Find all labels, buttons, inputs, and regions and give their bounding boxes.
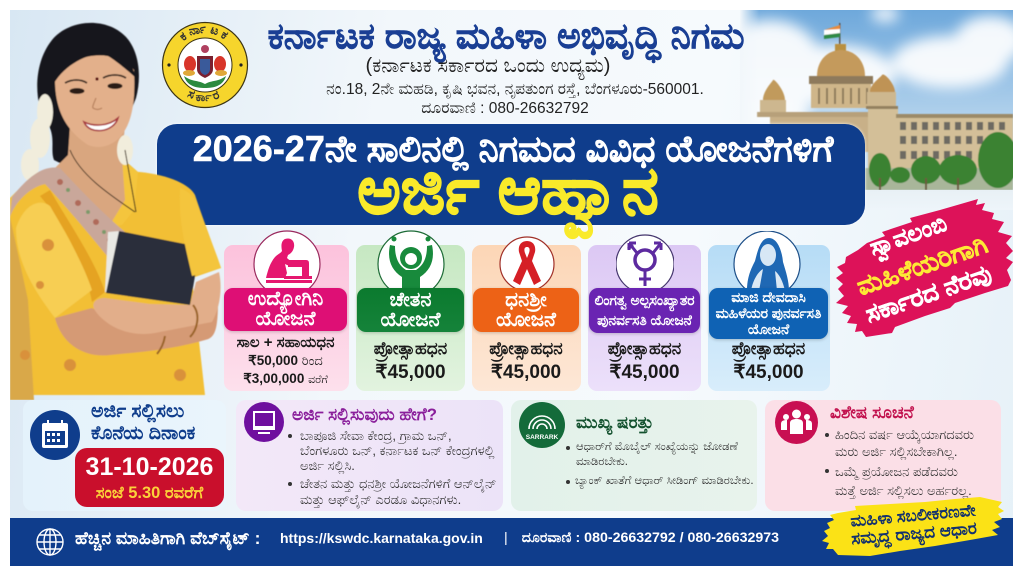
scheme label: Ex-Devadasi (709, 288, 828, 339)
notice bullets: ಹಿಂದಿನ ವರ್ಷ ಆಯ್ಕೆಯಾಗದವರು (835, 427, 974, 442)
Transgender benefit: ಪ್ರೋತ್ಸಾಹಧನ (608, 339, 681, 358)
conditions bullets: ಮಾಡಿರಬೇಕು. (576, 456, 628, 468)
how to apply bullets: ಚೇತನ ಮತ್ತು ಧನಶ್ರೀ ಯೋಜನೆಗಳಿಗೆ ಆನ್‌ಲೈನ್ (300, 476, 496, 491)
panel: main conditions (511, 400, 757, 511)
Udyogini benefit: ₹3,00,000 ವರೆಗೆ (243, 371, 328, 386)
banner call to apply: ಅರ್ಜಿ ಆಹ್ವಾನ (357, 153, 659, 227)
icon: red ribbon (499, 236, 555, 288)
card: Transgender rehabilitation (588, 245, 701, 391)
scheme label: Udyogini (224, 288, 347, 331)
conditions heading: ಮುಖ್ಯ ಷರತ್ತು (576, 413, 653, 432)
scheme label: Ex-Devadasi: ಮಾಜಿ ದೇವದಾಸಿ (731, 290, 806, 305)
Transgender benefit (608, 339, 681, 383)
woman with book (10, 22, 222, 400)
scheme label: Ex-Devadasi: ಯೋಜನೆ (748, 322, 789, 337)
notice bullets (825, 427, 974, 498)
scheme label: Chetana: ಚೇತನ (390, 289, 431, 311)
icon: globe (36, 528, 64, 556)
panel: special notice (765, 400, 1001, 511)
scheme label: Ex-Devadasi: ಮಹಿಳೆಯರ ಪುನರ್ವಸತಿ (716, 306, 821, 321)
Dhanashree benefit: ಪ್ರೋತ್ಸಾಹಧನ (489, 339, 563, 358)
how to apply bullets: ಮತ್ತು ಆಫ್‌ಲೈನ್ ಎರಡೂ ವಿಧಾನಗಳು. (300, 492, 461, 507)
main banner (157, 124, 865, 225)
icon: Aadhaar (519, 402, 565, 448)
how to apply bullets (288, 428, 496, 508)
banner heading: 2026-27ನೇ ಸಾಲಿನಲ್ಲಿ ನಿಗಮದ ವಿವಿಧ ಯೋಜನೆಗಳಿಗೆ (193, 128, 833, 169)
how to apply heading: ಅರ್ಜಿ ಸಲ್ಲಿಸುವುದು ಹೇಗೆ? (292, 405, 437, 424)
scheme label: Transgender: ಲಿಂಗತ್ವ ಅಲ್ಪಸಂಖ್ಯಾತರ (595, 293, 694, 308)
scheme label: Dhanashree (473, 288, 579, 332)
header: address: ನಂ.18, 2ನೇ ಮಹಡಿ, ಕೃಷಿ ಭವನ, ನೃಪತುಂಗ ರಸ್ತೆ, ಬೆಂಗಳೂರು-560001. (326, 81, 704, 98)
last date heading: ಅರ್ಜಿ ಸಲ್ಲಿಸಲು (91, 401, 184, 422)
notice bullets: ಮರು ಅರ್ಜಿ ಸಲ್ಲಿಸಬೇಕಾಗಿಲ್ಲ. (835, 444, 958, 459)
icon: calendar (30, 410, 80, 460)
Dhanashree benefit: ₹45,000 (491, 362, 561, 383)
Transgender benefit: ₹45,000 (609, 362, 680, 383)
scheme label: Transgender: ಪುನರ್ವಸತಿ ಯೋಜನೆ (597, 313, 692, 328)
Chetana benefit: ₹45,000 (375, 362, 446, 383)
panel: last date (23, 400, 226, 511)
how to apply bullets: ಬೆಂಗಳೂರು ಒನ್, ಕರ್ನಾಟಕ ಒನ್ ಕೇಂದ್ರಗಳಲ್ಲಿ (300, 443, 494, 458)
notice heading: ವಿಶೇಷ ಸೂಚನೆ (830, 403, 914, 422)
footer bar (10, 518, 1013, 566)
stamp: self-reliant women (836, 199, 1013, 337)
scheme label: Transgender (589, 288, 700, 333)
Chetana benefit: ಪ್ರೋತ್ಸಾಹಧನ (374, 339, 447, 358)
stamp: self-reliant women: ಮಹಿಳೆಯರಿಗಾಗಿ (853, 229, 991, 301)
card: Chetana (356, 245, 465, 391)
stamp: women's empowerment: ಮಹಿಳಾ ಸಬಲೀಕರಣವೇ (850, 502, 977, 530)
Ex-Devadasi benefit: ಪ್ರೋತ್ಸಾಹಧನ (732, 339, 805, 358)
stamp: self-reliant women: ಸ್ವಾವಲಂಬಿ (866, 210, 951, 265)
Udyogini benefit (237, 334, 334, 386)
header: organisation title: ಕರ್ನಾಟಕ ರಾಜ್ಯ ಮಹಿಳಾ ಅಭಿವೃದ್ಧಿ ನಿಗಮ (268, 15, 744, 56)
Udyogini benefit: ಸಾಲ + ಸಹಾಯಧನ (237, 334, 334, 351)
stamp: women's empowerment: ಸಮೃದ್ಧ ರಾಜ್ಯದ ಆಧಾರ (850, 519, 978, 552)
icon: sewing woman (253, 230, 321, 288)
conditions bullets (566, 441, 754, 489)
scheme label: Dhanashree: ಯೋಜನೆ (496, 309, 556, 331)
card: Dhanashree (472, 245, 581, 391)
card: Ex-Devadasi rehabilitation (708, 245, 830, 391)
icon: transgender symbol (616, 234, 674, 288)
Chetana benefit (374, 339, 447, 383)
logo: Karnataka emblem seal (162, 22, 248, 108)
stamp: self-reliant women: ಸರ್ಕಾರದ ನೆರವು (862, 259, 995, 329)
photo: Vidhana Soudha (740, 10, 1013, 190)
how to apply bullets: ಬಾಪೂಜಿ ಸೇವಾ ಕೇಂದ್ರ, ಗ್ರಾಮ ಒನ್, (300, 428, 452, 443)
Udyogini benefit: ₹50,000 ರಿಂದ (248, 353, 323, 368)
header: subtitle: (ಕರ್ನಾಟಕ ಸರ್ಕಾರದ ಒಂದು ಉದ್ಯಮ) (366, 55, 610, 77)
logo: Karnataka emblem seal: ಸರ್ಕಾರ (187, 90, 220, 102)
scheme label: Dhanashree: ಧನಶ್ರೀ (505, 289, 547, 311)
last date heading (91, 401, 195, 444)
icon: veiled woman (733, 231, 801, 288)
header: phone: ದೂರವಾಣಿ : 080-26632792 (421, 100, 589, 117)
conditions bullets: ಬ್ಯಾಂಕ್ ಖಾತೆಗೆ ಆಧಾರ್ ಸೀಡಿಂಗ್ ಮಾಡಿರಬೇಕು. (575, 475, 754, 487)
icon: raised arms figure (377, 230, 445, 288)
icon: people (775, 401, 818, 444)
footer separator and phones: | ದೂರವಾಣಿ : 080-26632792 / 080-26632973 (504, 530, 779, 546)
scheme label: Udyogini: ಉದ್ಯೋಗಿನಿ (248, 288, 323, 310)
panel: how to apply (236, 400, 503, 511)
notice bullets: ಮತ್ತೆ ಅರ್ಜಿ ಸಲ್ಲಿಸಲು ಅರ್ಹರಲ್ಲ. (835, 483, 972, 498)
deadline box (75, 448, 224, 507)
footer website url: https://kswdc.karnataka.gov.in (280, 530, 483, 546)
scheme label: Chetana: ಯೋಜನೆ (381, 309, 440, 331)
deadline box: 31-10-2026 (86, 453, 213, 481)
stamp: women's empowerment (822, 497, 1004, 556)
notice bullets: ಒಮ್ಮೆ ಪ್ರಯೋಜನ ಪಡೆದವರು (835, 464, 958, 479)
deadline box: ಸಂಜೆ 5.30 ರವರೆಗೆ (96, 484, 203, 502)
icon: computer (244, 402, 284, 442)
Dhanashree benefit (489, 339, 563, 383)
icon: Aadhaar: SARRARK (526, 434, 559, 441)
conditions bullets: ಆಧಾರ್‌ಗೆ ಮೊಬೈಲ್ ಸಂಖ್ಯೆಯನ್ನು ಜೋಡಣೆ (576, 441, 738, 453)
scheme label: Udyogini: ಯೋಜನೆ (256, 308, 315, 330)
Ex-Devadasi benefit: ₹45,000 (733, 362, 804, 383)
footer website label: ಹೆಚ್ಚಿನ ಮಾಹಿತಿಗಾಗಿ ವೆಬ್‌ಸೈಟ್ : (75, 528, 260, 548)
logo: Karnataka emblem seal: ಕರ್ನಾಟಕ (180, 26, 228, 40)
last date heading: ಕೊನೆಯ ದಿನಾಂಕ (91, 423, 195, 444)
scheme label: Chetana (357, 288, 464, 332)
Ex-Devadasi benefit (732, 339, 805, 383)
card: Udyogini (224, 245, 349, 391)
how to apply bullets: ಅರ್ಜಿ ಸಲ್ಲಿಸಿ. (300, 458, 355, 473)
